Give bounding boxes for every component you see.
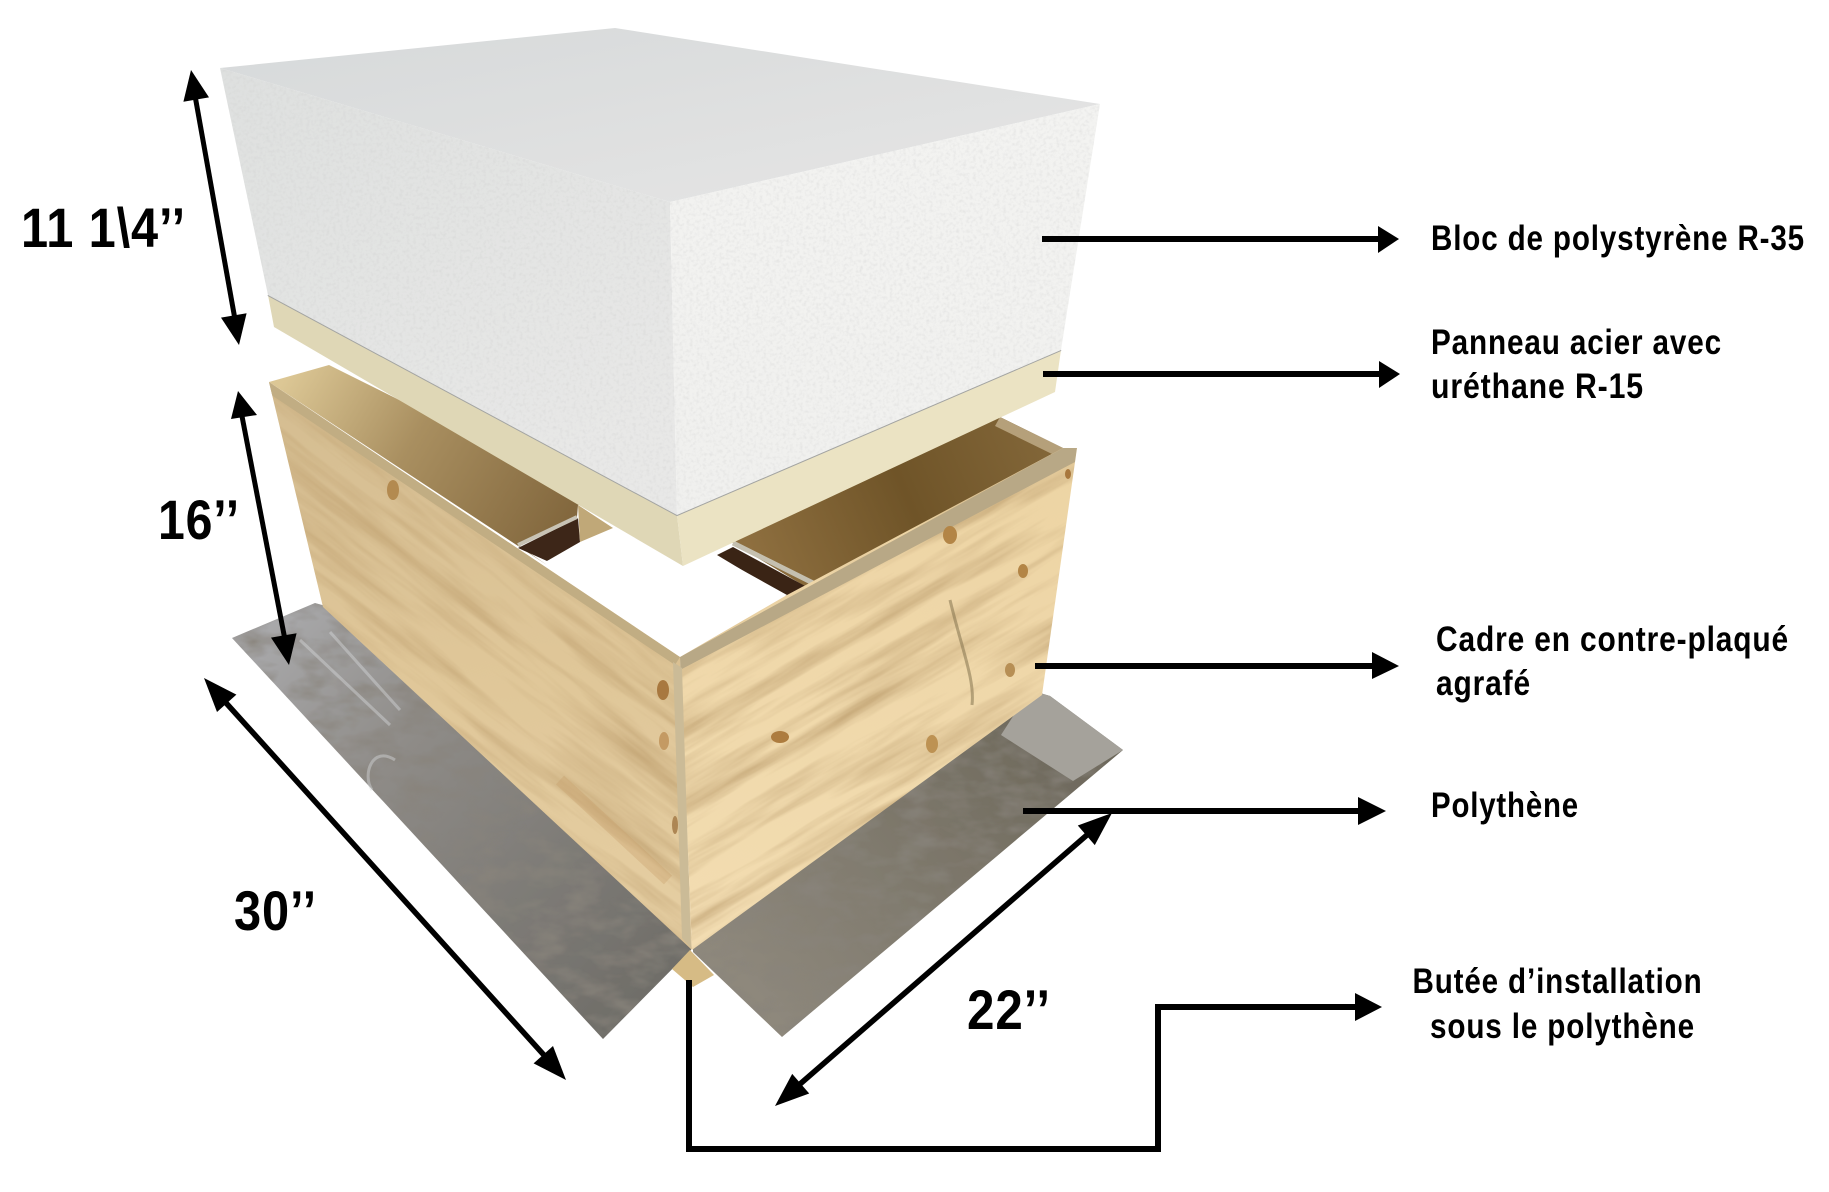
dimension label: 16'': 16’’ bbox=[158, 488, 240, 551]
polythene: left strip bbox=[232, 603, 691, 1039]
arrow: polystyrene bbox=[1042, 226, 1399, 253]
frame interior: opening bbox=[547, 530, 787, 655]
frame interior: left wall bbox=[269, 365, 620, 565]
frame interior: post bbox=[578, 505, 613, 542]
label: installation stop bbox=[1412, 962, 1702, 1046]
dimension arrow: block height bbox=[183, 70, 247, 345]
panel: left face bbox=[268, 295, 683, 566]
polystyrene block bbox=[220, 28, 1100, 515]
polythene: right strip bbox=[693, 690, 1123, 1037]
frame interior: dark gap left bbox=[518, 518, 580, 561]
frame: right face bbox=[680, 448, 1077, 950]
dimension arrow: frame height bbox=[231, 391, 297, 665]
label: polythene: Polythène bbox=[1431, 786, 1579, 825]
label: plywood frame: agrafé bbox=[1436, 664, 1531, 703]
polythene: light end patch bbox=[1001, 690, 1123, 781]
installation stop block bbox=[672, 950, 714, 987]
polystyrene: right face bbox=[670, 104, 1100, 515]
frame interior: rail left bbox=[518, 517, 577, 545]
frame interior: dark gap right bbox=[717, 547, 807, 597]
dimension arrow: length bbox=[204, 678, 566, 1080]
frame: corner edge bbox=[673, 662, 691, 948]
urethane steel panel bbox=[268, 295, 1061, 566]
label: installation stop: Butée d’installation bbox=[1412, 962, 1702, 1001]
label: steel panel: uréthane R-15 bbox=[1431, 367, 1644, 406]
dimension label: 22'': 22’’ bbox=[967, 978, 1051, 1041]
label: plywood frame bbox=[1436, 620, 1789, 703]
frame interior: rail right bbox=[733, 543, 813, 583]
arrow: steel panel bbox=[1043, 361, 1400, 388]
frame interior: right wall bbox=[700, 417, 1063, 587]
dimension arrow: width bbox=[775, 813, 1112, 1106]
arrow: installation stop elbow bbox=[689, 980, 1382, 1149]
polystyrene: top face bbox=[220, 28, 1100, 202]
polythene: reflection bbox=[300, 632, 400, 790]
polythene sheet bbox=[232, 603, 1123, 1039]
dimension label: 11 1\4'': 11 1\4’’ bbox=[21, 196, 186, 259]
label: installation stop: sous le polythène bbox=[1430, 1007, 1695, 1046]
arrow: polythene bbox=[1023, 797, 1386, 825]
dimension label: 30'': 30’’ bbox=[234, 879, 317, 942]
frame: left face bbox=[269, 382, 692, 950]
plywood frame bbox=[269, 365, 1077, 950]
label: steel panel bbox=[1431, 323, 1722, 406]
frame interior: back rim bbox=[995, 417, 1063, 454]
panel: right face bbox=[677, 350, 1061, 566]
polystyrene: left face bbox=[220, 68, 677, 515]
label: steel panel: Panneau acier avec bbox=[1431, 323, 1722, 362]
panel: steel edge bbox=[268, 295, 1061, 515]
arrow: plywood frame bbox=[1035, 652, 1399, 679]
